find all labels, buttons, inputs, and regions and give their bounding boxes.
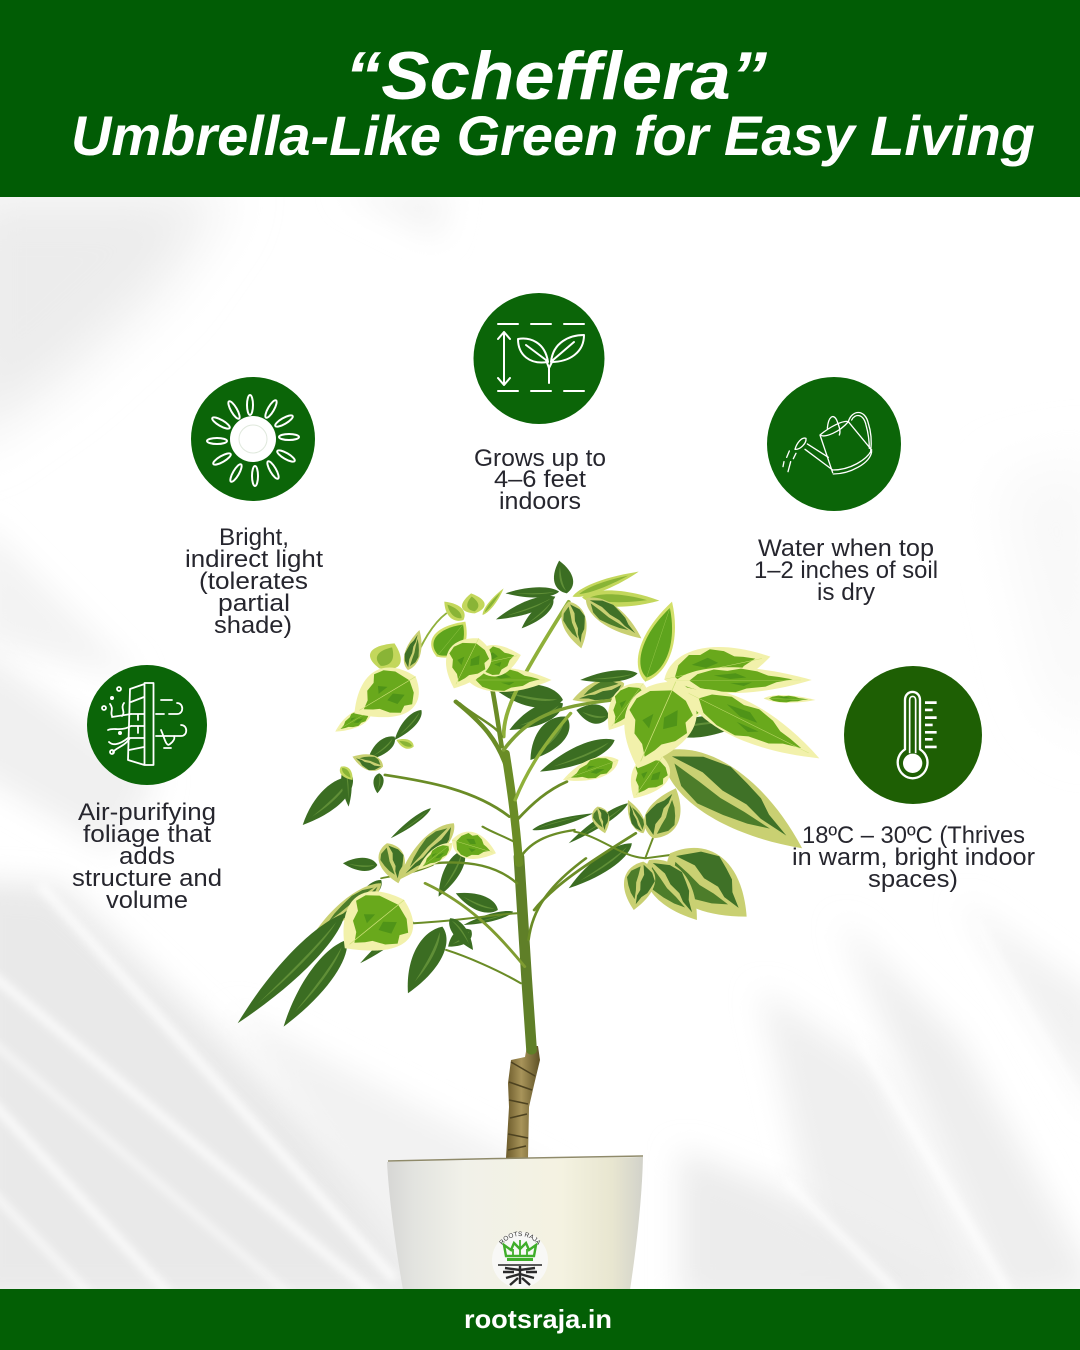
- label: air purifying: [72, 799, 222, 914]
- left middle leaves: [294, 707, 426, 832]
- icon: plant height: [474, 293, 604, 424]
- label: light: indirect light: [185, 546, 323, 573]
- label: temperature: 18ºC – 30ºC (Thrives: [802, 822, 1025, 849]
- label: height: Grows up to: [474, 445, 606, 472]
- icon: watering can: [767, 377, 901, 511]
- logo sticker: [492, 1232, 548, 1288]
- label: air purifying: volume: [106, 887, 188, 914]
- label: light: (tolerates: [199, 568, 308, 595]
- label: temperature: [792, 822, 1035, 893]
- lower-left leaves: [229, 817, 501, 1032]
- icon: thermometer: [844, 666, 982, 804]
- top cluster leaves: [493, 559, 660, 651]
- label: height: 4–6 feet: [494, 466, 586, 493]
- logo sticker: ROOTS RAJA: [499, 1232, 540, 1246]
- label: air purifying: foliage that: [83, 821, 211, 848]
- label: watering: 1–2 inches of soil: [754, 557, 938, 584]
- label: air purifying: structure and: [72, 865, 222, 892]
- plant: trunk: [506, 1046, 540, 1158]
- title: [71, 38, 1035, 167]
- label: height: [474, 445, 606, 515]
- title: Umbrella-Like Green for Easy Living: [71, 104, 1035, 167]
- footer website text: rootsraja.in: [464, 1304, 612, 1334]
- upper-left leaves: [331, 587, 551, 738]
- icon: sun: [191, 377, 315, 501]
- label: temperature: spaces): [868, 866, 958, 893]
- white pot: [387, 1155, 643, 1289]
- label: watering: Water when top: [758, 535, 934, 562]
- icon: air purifying filter: [87, 665, 207, 785]
- plant: foliage: [229, 559, 830, 1050]
- title: “Schefflera”: [345, 38, 767, 114]
- label: light: partial: [218, 590, 290, 617]
- stems: [381, 602, 670, 1050]
- label: air purifying: Air-purifying: [78, 799, 216, 826]
- label: watering: is dry: [817, 579, 875, 606]
- header band: [0, 0, 1080, 197]
- label: light: Bright,: [219, 524, 289, 551]
- label: air purifying: adds: [119, 843, 175, 870]
- footer band: [0, 1289, 1080, 1350]
- back leaves: [351, 674, 816, 952]
- right variegated leaves: [559, 598, 830, 868]
- label: light: shade): [214, 612, 292, 639]
- lower-right leaves: [589, 783, 769, 936]
- label: watering: [754, 535, 938, 606]
- label: light: [185, 524, 323, 639]
- label: height: indoors: [499, 488, 581, 515]
- label: temperature: in warm, bright indoor: [792, 844, 1035, 871]
